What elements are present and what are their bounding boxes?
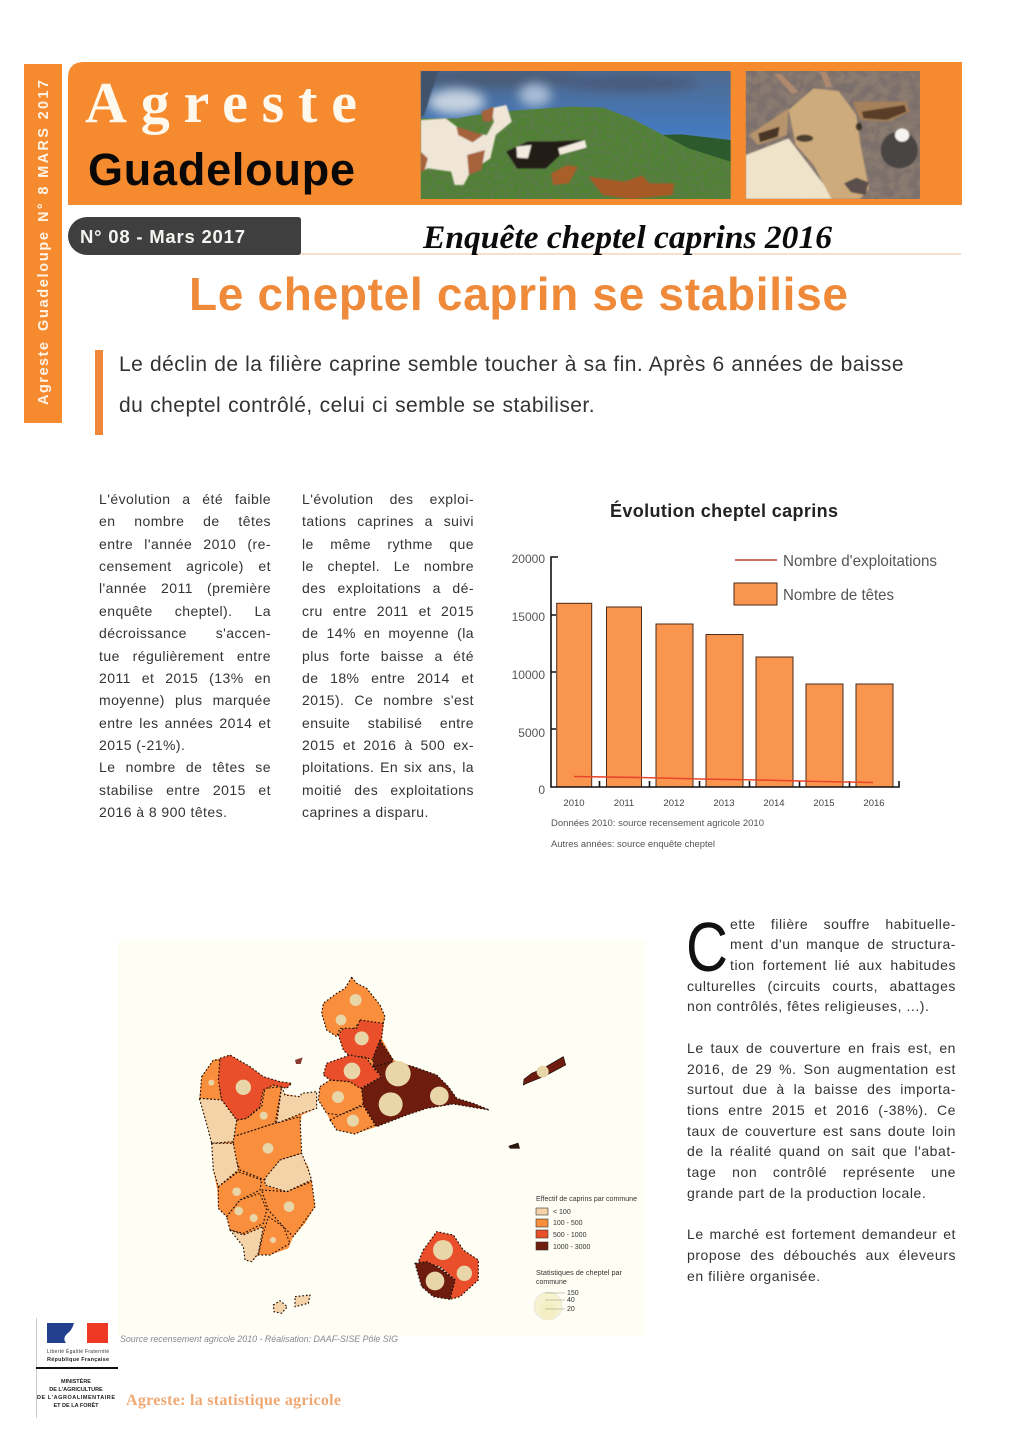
text column 3: market commentary: grande part de la production locale.: [687, 1185, 926, 1201]
map source note: Source recensement agricole 2010 - Réalisation: DAAF-SISE Pôle SIG: [120, 1334, 398, 1344]
text column 3: market commentary: propose des débouchés aux éleveurs: [687, 1247, 956, 1263]
text column 2: plus forte baisse a été: [302, 648, 474, 664]
text column 2: de 18% entre 2014 et: [302, 670, 474, 686]
text column 3: market commentary: ette filière souffre habituelle-: [730, 916, 956, 932]
bars: number of head: [557, 603, 893, 787]
x axis labels: 2011: [614, 798, 634, 809]
map legend: Effectif de caprins par commune: [536, 1196, 637, 1203]
text column 3: market commentary: ment d'un manque de structura-: [730, 936, 956, 952]
y axis labels: 0: [538, 783, 545, 797]
intro text line 2: du cheptel contrôlé, celui ci semble se stabiliser.: [119, 394, 595, 417]
text column 2: ensuite stabilisé entre: [302, 715, 474, 731]
text column 1: tue régulièrement entre: [99, 648, 271, 664]
text column 1: entre les années 2014 et: [99, 715, 271, 731]
heading: Agreste: Agreste: [85, 70, 357, 135]
text column 1: décroissance s'accen-: [99, 625, 271, 641]
intro accent bar: [95, 350, 103, 435]
text column 1: [99, 491, 271, 820]
text column 1: en nombre de têtes: [99, 513, 271, 529]
sidebar: vertical issue label: Agreste: [36, 342, 52, 405]
logo: French Republic and ministry: Liberté Égalité Fraternité: [47, 1348, 109, 1355]
heading: Guadeloupe: Guadeloupe: [88, 144, 355, 195]
text column 2: 2015). Ce nombre s'est: [302, 692, 474, 708]
logo: French Republic and ministry: ET DE LA FORÊT: [53, 1401, 99, 1409]
legend: [734, 553, 937, 605]
y axis labels: 5000: [518, 726, 545, 740]
data sources: Autres années: source enquête cheptel: [551, 839, 715, 849]
logo: French Republic and ministry: DE L'AGRICULTURE: [49, 1387, 103, 1393]
map legend: 1000 - 3000: [553, 1244, 590, 1251]
footer tagline: Agreste: la statistique agricole: [126, 1392, 341, 1409]
x axis labels: 2013: [713, 798, 735, 809]
y axis labels: 20000: [512, 552, 545, 566]
chart title: Évolution cheptel caprins: [610, 500, 838, 521]
text column 1: enquête cheptel). La: [99, 603, 271, 619]
y axis labels: [512, 552, 545, 797]
issue pill: number and date: N° 08 - Mars 2017: [80, 226, 245, 247]
photo: goats on a green hillside: [417, 69, 731, 199]
data sources: Données 2010: source recensement agricole 2010: [551, 818, 764, 828]
choropleth communes: [199, 977, 520, 1313]
map legend: 150: [567, 1290, 579, 1297]
proportional circles: herd size per commune: [208, 994, 472, 1290]
text column 2: 2015 et 2016 à 500 ex-: [302, 737, 474, 753]
text column 3: market commentary: surtout due à la baisse des importa-: [687, 1081, 956, 1097]
subtitle: survey name: Enquête cheptel caprins 2016: [422, 220, 832, 256]
text column 3: market commentary: en filière organisée.: [687, 1268, 821, 1284]
y axis labels: 10000: [512, 668, 545, 682]
line: number of farms: [574, 776, 873, 782]
main title: Le cheptel caprin se stabilise: [189, 268, 848, 320]
text column 1: L'évolution a été faible: [99, 491, 271, 507]
logo: French Republic and ministry: République Française: [47, 1357, 109, 1363]
text column 1: 2016 à 8 900 têtes.: [99, 804, 227, 820]
text column 3: market commentary: taux de couverture est sans doute loin: [687, 1123, 956, 1139]
header banner: [68, 62, 962, 205]
map legend: 20: [567, 1306, 575, 1313]
x axis labels: 2010: [563, 798, 585, 809]
legend: Nombre d'exploitations: [783, 553, 937, 570]
map legend: 40: [567, 1297, 575, 1304]
y axis labels: 15000: [512, 610, 545, 624]
map legend: Statistiques de cheptel par: [536, 1270, 623, 1277]
panel: map of Guadeloupe: [118, 940, 645, 1344]
text column 3: market commentary: tage non contrôlé représente une: [687, 1164, 956, 1180]
map legend: < 100: [553, 1209, 571, 1216]
text column 2: des exploitations a dé-: [302, 580, 474, 596]
text column 1: l'année 2011 (première: [99, 580, 271, 596]
text column 2: tations caprines a suivi: [302, 513, 474, 529]
text column 1: moyenne) plus marquée: [99, 692, 271, 708]
La Désirade island: [523, 1057, 566, 1085]
chart: evolution of the goat herd: [512, 500, 937, 849]
text column 2: caprines a disparu.: [302, 804, 429, 820]
text column 1: entre l'année 2010 (re-: [99, 536, 271, 552]
logo: French Republic and ministry: [36, 1318, 118, 1418]
text column 2: le cheptel. Le nombre: [302, 558, 474, 574]
text column 3: market commentary: non contrôlés, fêtes religieuses, ...).: [687, 998, 929, 1014]
text column 3: market commentary: tions entre 2015 et 2016 (-38%). Ce: [687, 1102, 956, 1118]
map legend: 500 - 1000: [553, 1232, 587, 1239]
x axis labels: 2015: [813, 798, 835, 809]
text column 2: L'évolution des exploi-: [302, 491, 474, 507]
issue pill: number and date: [68, 217, 301, 255]
map legend: commune: [536, 1279, 567, 1286]
text column 2: cru entre 2011 et 2015: [302, 603, 474, 619]
x axis labels: [563, 798, 885, 809]
sidebar: vertical issue label: N° 8 MARS 2017: [36, 80, 52, 222]
text column 2: le même rythme que: [302, 536, 474, 552]
legend: Nombre de têtes: [783, 587, 894, 604]
x axis labels: 2014: [763, 798, 785, 809]
logo: French Republic and ministry: MINISTÈRE: [61, 1377, 91, 1385]
text column 2: moitié des exploitations: [302, 782, 474, 798]
text column 2: ploitations. En six ans, la: [302, 759, 474, 775]
map legend: 100 - 500: [553, 1220, 583, 1227]
axes: [551, 557, 899, 787]
intro text line 1: Le déclin de la filière caprine semble toucher à sa fin. Après 6 années de baisse: [119, 353, 904, 376]
text column 1: 2011 et 2015 (13% en: [99, 670, 271, 686]
text column 1: censement agricole) et: [99, 558, 271, 574]
text column 3: market commentary: [687, 916, 956, 1284]
text column 1: Le nombre de têtes se: [99, 759, 271, 775]
text column 3: market commentary: Le marché est fortement demandeur et: [687, 1226, 956, 1242]
x axis labels: 2016: [863, 798, 885, 809]
text column 3: market commentary: Le taux de couverture en frais est, en: [687, 1040, 956, 1056]
x axis labels: 2012: [663, 798, 685, 809]
photo: close-up of a goat head: [746, 71, 920, 199]
sidebar: vertical issue label: Guadeloupe: [36, 232, 52, 331]
data sources: [551, 818, 764, 849]
text column 2: de 14% en moyenne (la: [302, 625, 474, 641]
text column 3: market commentary: tion fortement lié aux habitudes: [730, 957, 956, 973]
text column 3: market commentary: 2016, de 29 %. Son augmentation est: [687, 1061, 956, 1077]
logo: French Republic and ministry: DE L'AGROALIMENTAIRE: [37, 1395, 115, 1401]
map legend: [534, 1196, 637, 1320]
text column 1: stabilise entre 2015 et: [99, 782, 271, 798]
text column 1: 2015 (-21%).: [99, 737, 185, 753]
text column 3: market commentary: de la réalité quand on sait que l'abat-: [687, 1143, 956, 1159]
sidebar: vertical issue label: [24, 64, 62, 423]
text column 3: market commentary: culturelles (circuits courts, abattages: [687, 978, 956, 994]
text column 2: [302, 491, 474, 820]
drop cap: C: [686, 908, 728, 986]
